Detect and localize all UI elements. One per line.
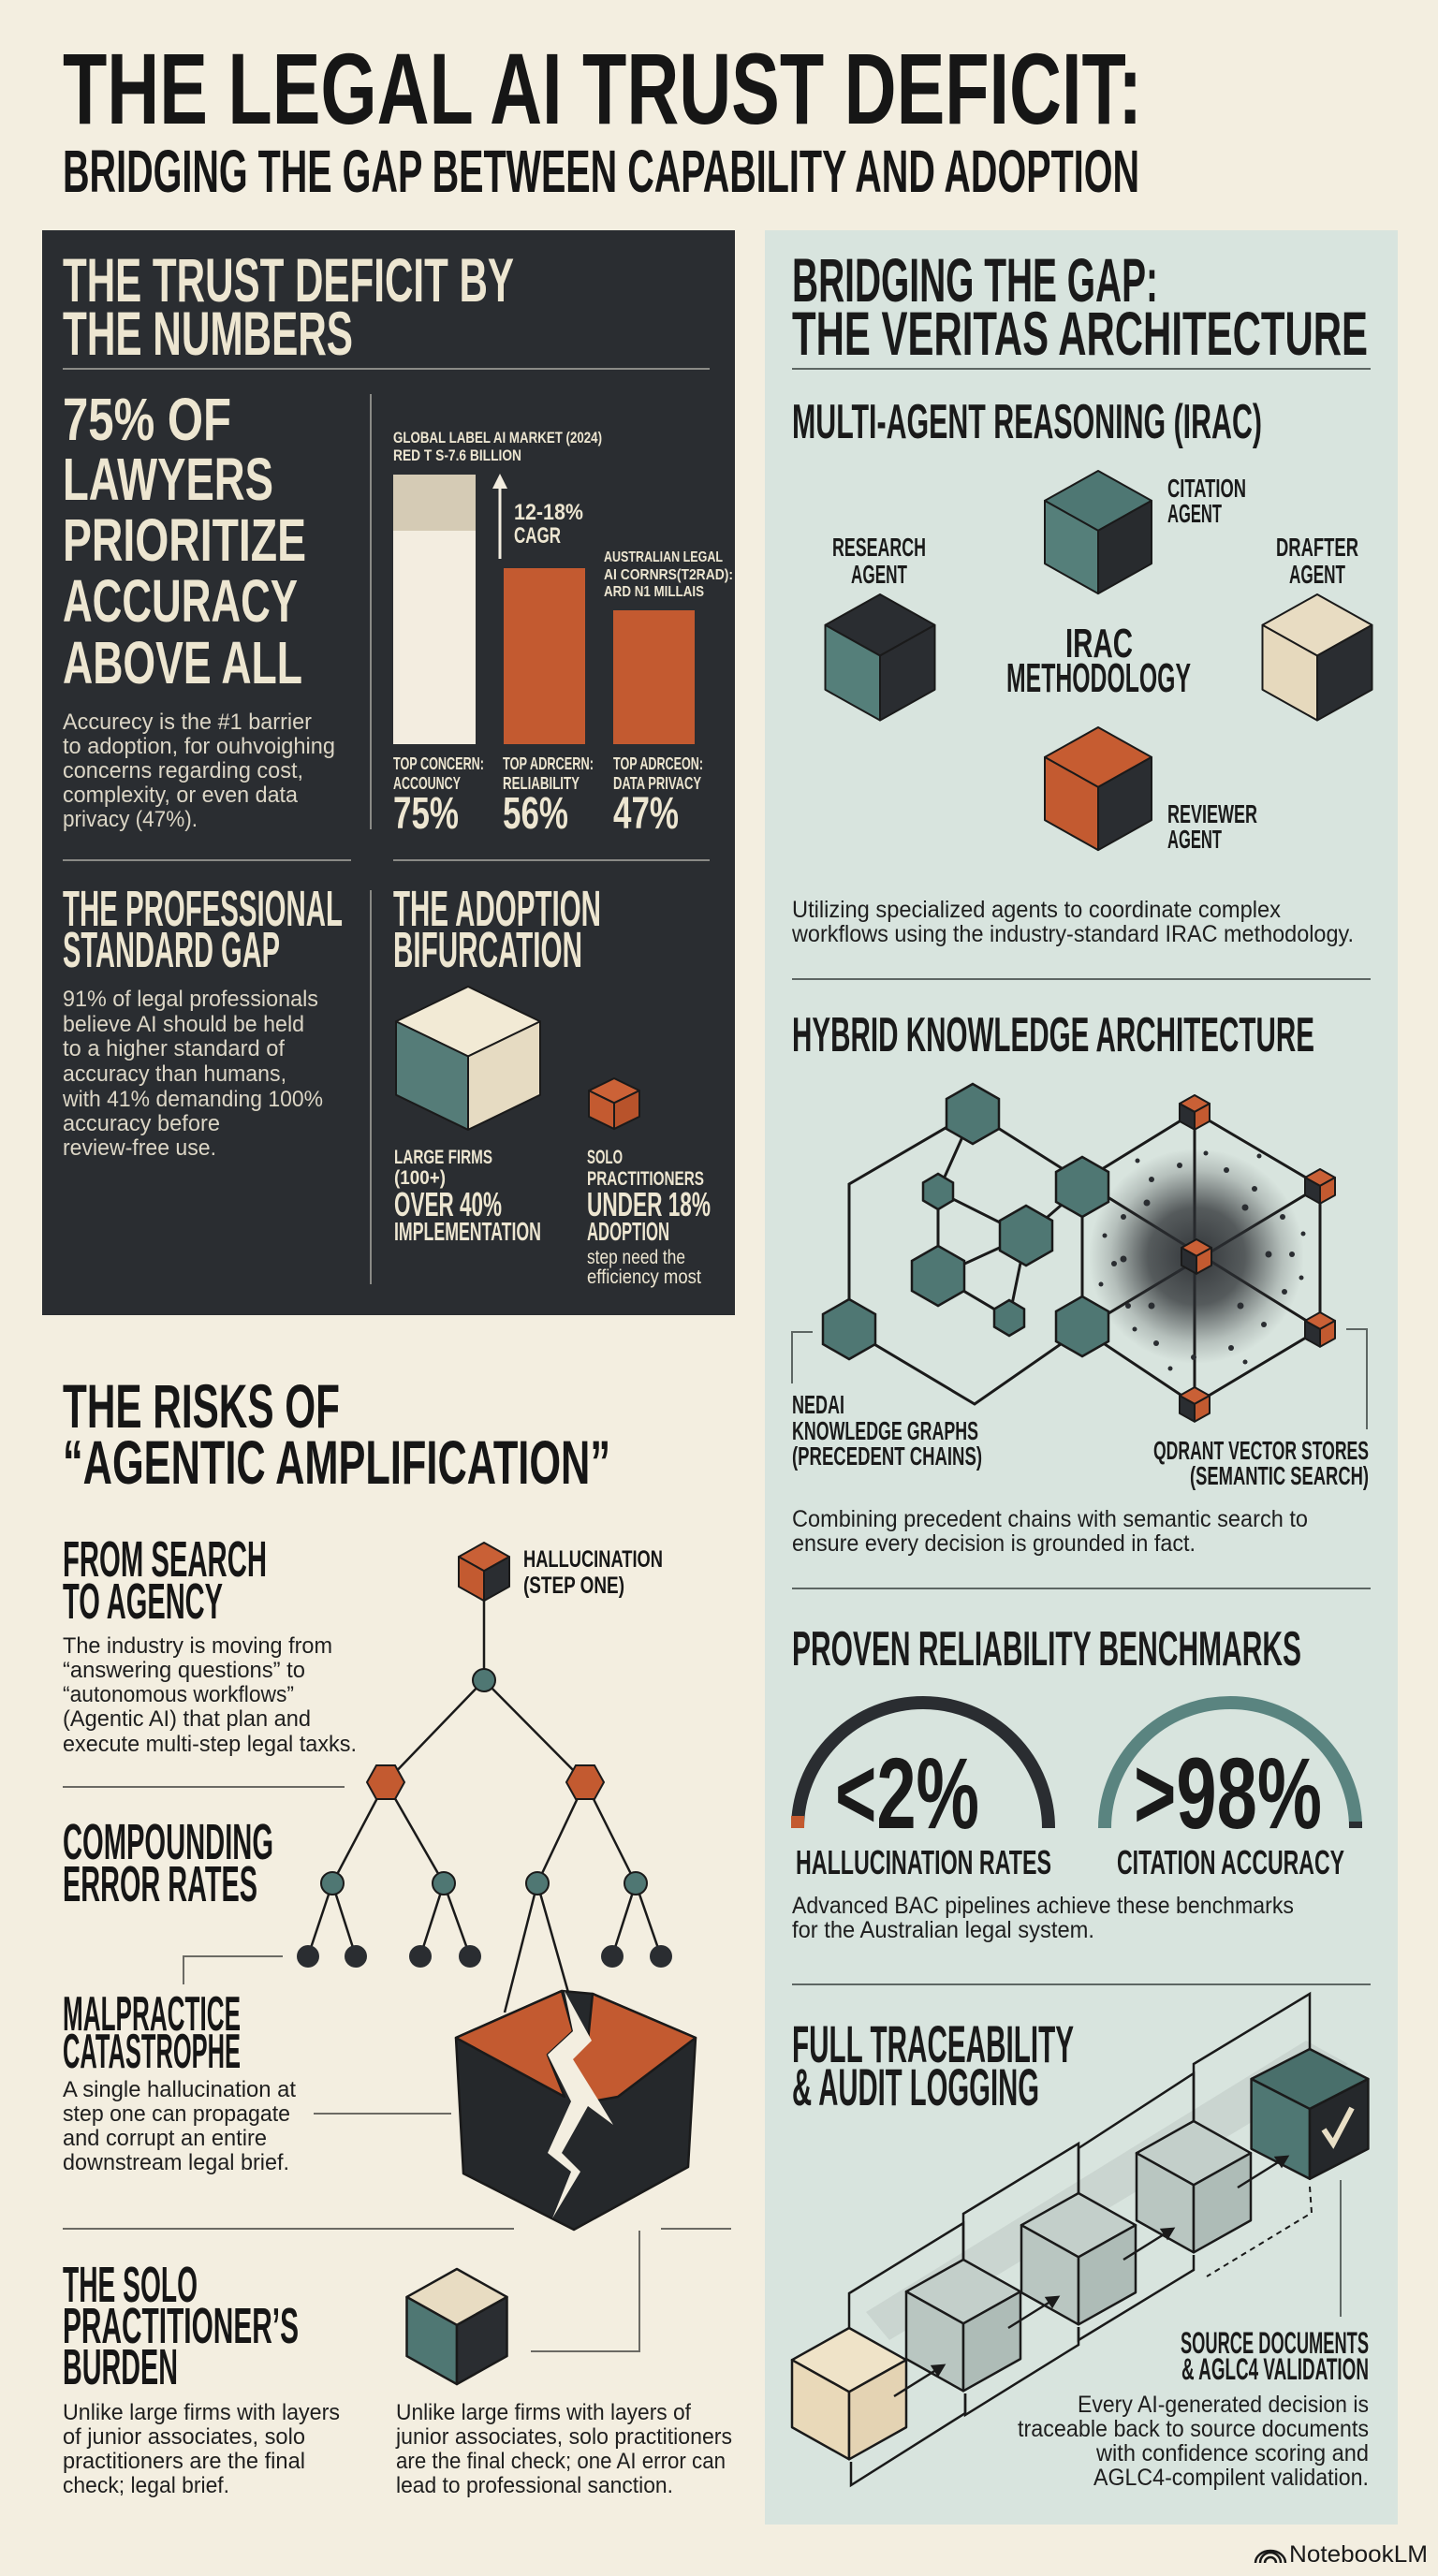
heading: bridging the gap: BRIDGING THE GAP: bbox=[792, 245, 1158, 315]
icon: source document cube bbox=[792, 2328, 906, 2459]
heading: compounding error rates: ERROR RATES bbox=[63, 1856, 257, 1912]
text: 91% of legal professionals: believe AI should be held bbox=[63, 1012, 304, 1037]
block: malpractice catastrophe: downstream legal brief. bbox=[63, 2150, 289, 2175]
block: malpractice catastrophe: step one can propagate bbox=[63, 2101, 290, 2127]
diagram: IRAC agents: AGENT bbox=[1167, 499, 1222, 528]
diagram: error propagation tree: HALLUCINATION bbox=[523, 1546, 663, 1573]
big stat: 75% of lawyers bbox=[63, 386, 306, 696]
text: 91% of legal professionals bbox=[62, 987, 323, 1161]
text: accuracy barrier bbox=[63, 710, 335, 832]
label: IRAC methodology: IRAC bbox=[1065, 621, 1133, 666]
block: solo practitioner's burden bbox=[63, 2257, 340, 2498]
stat: large firms: LARGE FIRMS bbox=[394, 1147, 492, 1168]
bar chart: concerns bbox=[393, 429, 733, 839]
icon: cracked cube bbox=[456, 1991, 696, 2230]
bar chart: concerns: RELIABILITY bbox=[503, 774, 580, 793]
label: knowledge graphs: (PRECEDENT CHAINS) bbox=[792, 1442, 982, 1471]
block: solo practitioner's burden: THE SOLO bbox=[63, 2257, 198, 2313]
heading: full traceability: & AUDIT LOGGING bbox=[792, 2057, 1039, 2116]
block: from search to agency: The industry is moving from bbox=[63, 1633, 332, 1659]
block: from search to agency: TO AGENCY bbox=[63, 1573, 223, 1630]
text: utilizing specialized agents: Utilizing specialized agents to coordinate complex bbox=[792, 897, 1281, 923]
diagram: hybrid knowledge graph bbox=[792, 1084, 1367, 1429]
logo: NotebookLM: NotebookLM bbox=[1289, 2541, 1428, 2568]
block: malpractice catastrophe bbox=[63, 1987, 296, 2175]
panel: veritas architecture bbox=[765, 230, 1398, 2525]
heading: compounding error rates bbox=[63, 1814, 273, 1912]
big stat: 75% of lawyers: LAWYERS bbox=[63, 446, 273, 513]
text: 91% of legal professionals: with 41% demanding 100% bbox=[62, 1087, 323, 1112]
heading: trust deficit by the numbers bbox=[63, 245, 514, 368]
label: IRAC methodology: METHODOLOGY bbox=[1006, 655, 1191, 701]
stat: solo practitioners: SOLO bbox=[587, 1147, 623, 1168]
gauge: hallucination rates: HALLUCINATION RATES bbox=[796, 1843, 1051, 1881]
heading: trust deficit by the numbers: THE NUMBERS bbox=[63, 299, 353, 368]
heading: full traceability bbox=[792, 2014, 1074, 2116]
bar chart: concerns: ARD N1 MILLAIS bbox=[604, 584, 704, 600]
big stat: 75% of lawyers: 75% OF bbox=[63, 386, 231, 453]
bar chart: concerns: TOP CONCERN: bbox=[393, 754, 484, 773]
diagram: IRAC agents: AGENT bbox=[1167, 825, 1222, 854]
text: accuracy barrier: to adoption, for ouhvoighing bbox=[63, 734, 335, 759]
label: vector stores bbox=[1153, 1436, 1369, 1490]
text: every decision traceable: traceable back to source documents bbox=[1018, 2416, 1369, 2442]
big stat: 75% of lawyers: ACCURACY bbox=[63, 567, 298, 635]
teal hex nodes bbox=[823, 1084, 1108, 1359]
text: utilizing specialized agents: workflows using the industry-standard IRAC methodology. bbox=[791, 921, 1354, 947]
orange cube nodes bbox=[1180, 1095, 1335, 1422]
text: professional sanction: lead to professional sanction. bbox=[396, 2473, 673, 2498]
stat: solo practitioners: ADOPTION bbox=[587, 1217, 669, 1246]
block: from search to agency: FROM SEARCH bbox=[63, 1531, 267, 1588]
diagram: IRAC agents bbox=[826, 471, 1372, 854]
stat: solo practitioners: PRACTITIONERS bbox=[587, 1168, 704, 1190]
text: every decision traceable: AGLC4-compilent validation. bbox=[1093, 2465, 1369, 2491]
text: advanced pipelines bbox=[792, 1893, 1294, 1943]
block: from search to agency: “autonomous workflows” bbox=[63, 1682, 294, 1707]
text: 91% of legal professionals: accuracy than humans, bbox=[63, 1061, 286, 1087]
text: 91% of legal professionals: 91% of legal professionals bbox=[63, 987, 318, 1012]
text: professional sanction: are the final check; one AI error can bbox=[396, 2449, 726, 2474]
heading: professional standard gap: STANDARD GAP bbox=[63, 922, 280, 978]
stat: large firms: OVER 40% bbox=[394, 1185, 502, 1223]
bar chart: concerns: 12-18% bbox=[514, 500, 583, 525]
bar chart: concerns: DATA PRIVACY bbox=[613, 774, 701, 793]
title bbox=[63, 32, 1142, 205]
stat: solo practitioners bbox=[587, 1147, 711, 1288]
heading: adoption bifurcation: THE ADOPTION bbox=[393, 881, 601, 937]
label: IRAC methodology bbox=[1006, 621, 1191, 701]
stat: large firms: IMPLEMENTATION bbox=[394, 1217, 541, 1246]
bar chart: concerns: TOP ADRCEON: bbox=[613, 754, 703, 773]
block: solo practitioner's burden: practitioners are the final bbox=[63, 2449, 305, 2474]
icon: solo cube bbox=[589, 1078, 639, 1129]
bar chart: concerns: AI CORNRS(T2RAD): bbox=[604, 567, 733, 583]
text: advanced pipelines: Advanced BAC pipelines achieve these benchmarks bbox=[792, 1893, 1294, 1919]
block: solo practitioner's burden: of junior associates, solo bbox=[63, 2424, 305, 2450]
block: malpractice catastrophe: and corrupt an entire bbox=[63, 2126, 267, 2151]
heading: risks of agentic amplification: THE RISKS OF bbox=[63, 1371, 340, 1441]
text: combining precedent chains bbox=[792, 1506, 1308, 1557]
icon: large firm cube bbox=[396, 987, 540, 1130]
diagram: IRAC agents: RESEARCH bbox=[832, 533, 926, 562]
text: accuracy barrier: privacy (47%). bbox=[63, 807, 198, 832]
text: 91% of legal professionals: review-free use. bbox=[63, 1135, 216, 1161]
text: combining precedent chains: Combining precedent chains with semantic search to bbox=[792, 1506, 1308, 1532]
label: source documents bbox=[1181, 2326, 1369, 2386]
heading: professional standard gap bbox=[63, 881, 343, 978]
text: advanced pipelines: for the Australian legal system. bbox=[792, 1917, 1094, 1943]
icon: drafter agent cube bbox=[1262, 594, 1372, 721]
gauge: hallucination rates: <2% bbox=[835, 1736, 979, 1850]
block: malpractice catastrophe: A single hallucination at bbox=[63, 2077, 296, 2102]
icon: hallucination cube bbox=[459, 1543, 509, 1601]
block: solo practitioner's burden: PRACTITIONER’S bbox=[63, 2298, 299, 2354]
stat: large firms bbox=[394, 1147, 541, 1246]
diagram: error propagation tree: (STEP ONE) bbox=[523, 1573, 624, 1599]
block: malpractice catastrophe: CATASTROPHE bbox=[63, 2025, 241, 2079]
diagram: error propagation tree bbox=[297, 1543, 696, 2230]
icon: reviewer agent cube bbox=[1045, 727, 1152, 850]
icon: research agent cube bbox=[826, 594, 934, 721]
block: from search to agency: “answering questions” to bbox=[63, 1658, 305, 1683]
bar chart: concerns: CAGR bbox=[514, 523, 561, 549]
block: solo practitioner's burden: BURDEN bbox=[63, 2339, 178, 2395]
text: professional sanction: junior associates, solo practitioners bbox=[395, 2424, 732, 2450]
block: solo practitioner's burden: Unlike large firms with layers bbox=[63, 2400, 340, 2425]
bar chart: concerns: AUSTRALIAN LEGAL bbox=[604, 549, 723, 565]
heading: adoption bifurcation: BIFURCATION bbox=[393, 922, 582, 978]
diagram: IRAC agents: REVIEWER bbox=[1167, 799, 1257, 828]
heading: professional standard gap: THE PROFESSIONAL bbox=[63, 881, 343, 937]
bar chart: concerns: 56% bbox=[503, 789, 568, 839]
bar chart: concerns: TOP ADRCERN: bbox=[503, 754, 594, 773]
text: accuracy barrier: concerns regarding cost, bbox=[63, 758, 303, 783]
bar chart: concerns: 75% bbox=[393, 789, 459, 839]
label: knowledge graphs bbox=[792, 1390, 982, 1471]
bar chart: concerns: ACCOUNCY bbox=[393, 774, 461, 793]
block: from search to agency: (Agentic AI) that plan and bbox=[63, 1706, 311, 1732]
text: accuracy barrier: Accurecy is the #1 barrier bbox=[63, 710, 312, 735]
text: every decision traceable: with confidence scoring and bbox=[1095, 2440, 1369, 2466]
text: every decision traceable bbox=[1018, 2392, 1369, 2491]
heading: adoption bifurcation bbox=[393, 881, 601, 978]
text: professional sanction bbox=[395, 2400, 732, 2498]
big stat: 75% of lawyers: ABOVE ALL bbox=[63, 629, 302, 696]
gauge: citation accuracy bbox=[1105, 1703, 1356, 1881]
heading: risks of agentic amplification bbox=[63, 1371, 610, 1497]
stat: solo practitioners: UNDER 18% bbox=[587, 1185, 711, 1223]
diagram: IRAC agents: DRAFTER bbox=[1276, 533, 1358, 562]
icon: validated cube with checkmark bbox=[1252, 2049, 1368, 2179]
heading: full traceability: FULL TRACEABILITY bbox=[792, 2014, 1074, 2073]
stat: solo practitioners: efficiency most bbox=[587, 1266, 701, 1288]
diagram: IRAC agents: AGENT bbox=[1289, 560, 1345, 589]
gauge: hallucination rates bbox=[796, 1703, 1051, 1881]
big stat: 75% of lawyers: PRIORITIZE bbox=[63, 506, 306, 574]
heading: risks of agentic amplification: “AGENTIC AMPLIFICATION” bbox=[63, 1427, 610, 1497]
bar chart: concerns: 47% bbox=[613, 789, 679, 839]
text: accuracy barrier: complexity, or even data bbox=[63, 783, 299, 808]
block: solo practitioner's burden: check; legal brief. bbox=[63, 2473, 229, 2498]
bar chart: concerns: GLOBAL LABEL AI MARKET (2024) bbox=[393, 429, 602, 446]
block: from search to agency: execute multi-step legal taxks. bbox=[63, 1732, 357, 1757]
diagram: IRAC agents: AGENT bbox=[851, 560, 907, 589]
bar chart: concerns: RED T S-7.6 BILLION bbox=[393, 446, 521, 464]
text: every decision traceable: Every AI-generated decision is bbox=[1078, 2392, 1369, 2418]
icon: citation agent cube bbox=[1045, 471, 1152, 593]
label: knowledge graphs: KNOWLEDGE GRAPHS bbox=[792, 1416, 978, 1445]
block: from search to agency bbox=[63, 1531, 357, 1757]
text: 91% of legal professionals: to a higher standard of bbox=[63, 1036, 285, 1061]
vector cloud bbox=[1089, 1149, 1304, 1364]
stat: solo practitioners: step need the bbox=[587, 1247, 685, 1268]
text: 91% of legal professionals: accuracy before bbox=[63, 1111, 220, 1136]
gauge: citation accuracy: >98% bbox=[1134, 1736, 1322, 1850]
text: utilizing specialized agents bbox=[791, 897, 1354, 947]
stat: large firms: (100+) bbox=[394, 1167, 446, 1189]
heading: bridging the gap bbox=[792, 245, 1368, 368]
panel: trust deficit by the numbers bbox=[42, 230, 735, 1315]
diagram: IRAC agents: CITATION bbox=[1167, 474, 1246, 503]
text: combining precedent chains: ensure every decision is grounded in fact. bbox=[792, 1530, 1196, 1557]
text: professional sanction: Unlike large firms with layers of bbox=[396, 2400, 691, 2425]
diagram: audit chain bbox=[792, 1994, 1368, 2485]
heading: trust deficit by the numbers: THE TRUST DEFICIT BY bbox=[63, 245, 514, 315]
icon: solo cube bbox=[406, 2269, 507, 2384]
heading: compounding error rates: COMPOUNDING bbox=[63, 1814, 273, 1870]
block: malpractice catastrophe: MALPRACTICE bbox=[63, 1987, 241, 2042]
arrow: CAGR bbox=[492, 474, 507, 559]
label: knowledge graphs: NEDAI bbox=[792, 1390, 844, 1419]
